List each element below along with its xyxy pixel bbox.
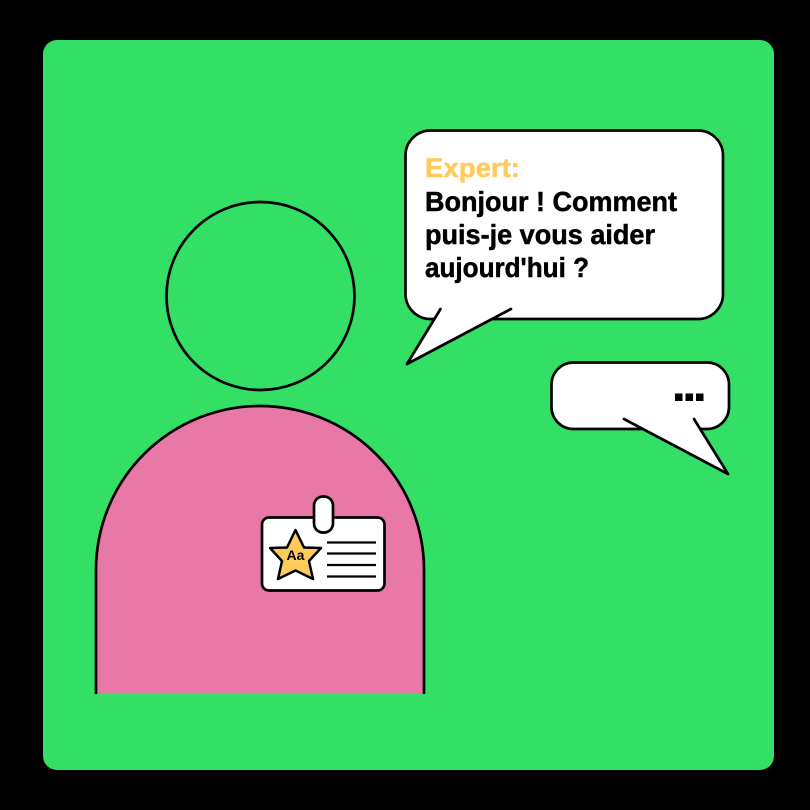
bubble message: puis-je vous aider: [425, 219, 655, 250]
icon: name badge: [262, 496, 384, 590]
bubble tail: [407, 309, 511, 364]
bubble message: Bonjour ! Comment: [425, 186, 677, 217]
bubble body: [406, 130, 723, 319]
person head: [166, 202, 354, 390]
reply speech bubble: [552, 362, 729, 474]
typing dots: [675, 394, 704, 401]
bubble message: aujourd'hui ?: [425, 252, 589, 283]
badge text lines: [327, 542, 376, 576]
icon: person: [96, 202, 424, 694]
badge star label: Aa: [287, 547, 305, 563]
bubble speaker label: Expert:: [425, 153, 520, 183]
bubble message: [425, 186, 677, 283]
reply bubble tail outline: [624, 419, 728, 474]
badge star: [270, 530, 321, 579]
reply bubble tail: [624, 419, 728, 474]
person body: [96, 406, 424, 694]
badge clip: [314, 496, 333, 532]
reply bubble body: [552, 362, 729, 429]
badge card: [262, 518, 384, 590]
bubble tail outline: [407, 309, 511, 364]
expert speech bubble: [406, 130, 723, 364]
